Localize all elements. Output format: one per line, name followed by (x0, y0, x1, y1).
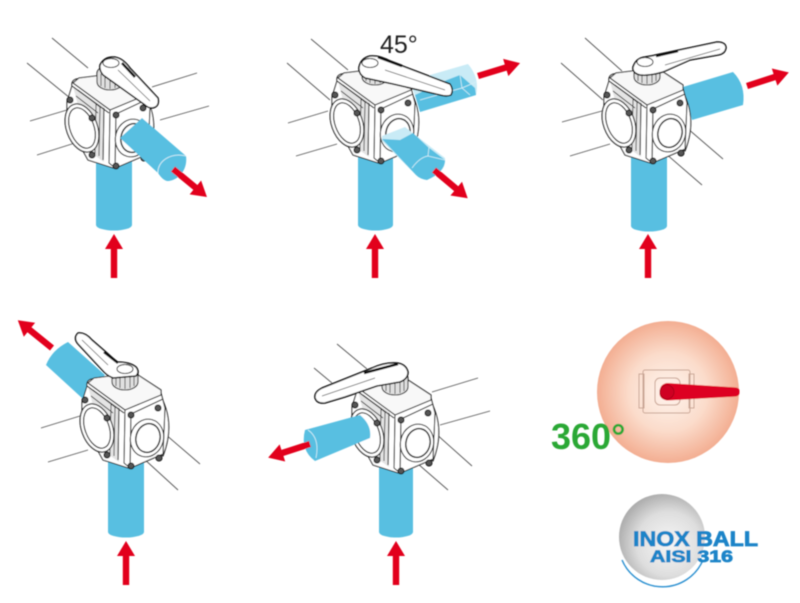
valve top view (639, 370, 694, 413)
arrow: outlet (167, 162, 213, 204)
arrow: outlet (744, 64, 792, 95)
inlet pipe (108, 460, 144, 538)
red handle top view (659, 383, 740, 400)
guide lines (561, 38, 723, 185)
front outlet pipe, partly filled (382, 127, 445, 180)
valve body (324, 61, 419, 164)
outlet pipe (46, 342, 105, 398)
arrow: inlet (366, 234, 384, 278)
label: 360 degrees: 360° (551, 416, 625, 457)
panel: position 2, 45 degree split flow (287, 31, 523, 278)
guide lines (41, 416, 200, 490)
arrow: front outlet (428, 163, 473, 205)
handle (315, 363, 408, 403)
panel: position 3, flow bottom to upper right (561, 38, 792, 278)
arrow: inlet (105, 234, 123, 278)
inlet pipe (631, 150, 667, 232)
inlet pipe (358, 150, 393, 230)
label: 45 degrees: 45° (380, 31, 418, 59)
panel: position 5, flow bottom to left (265, 344, 490, 585)
guide lines (27, 38, 209, 155)
panel: position 1, flow bottom to front right (27, 38, 213, 278)
arrow: outlet (265, 435, 313, 466)
handle (359, 56, 452, 96)
badge: inox ball (619, 494, 758, 587)
arrow: inlet (387, 541, 405, 585)
blue arc (622, 560, 703, 587)
valve body (596, 61, 691, 164)
valve body (59, 66, 154, 169)
valve body (344, 371, 439, 474)
outlet pipe (120, 118, 186, 181)
panel: 360 degree rotation (551, 321, 740, 463)
valve body (74, 366, 169, 469)
panel: position 4, flow bottom to upper left (12, 313, 200, 585)
upper outlet pipe, partly filled (413, 64, 477, 112)
handle (100, 57, 158, 108)
guide lines (287, 39, 348, 156)
arrow: upper outlet (475, 55, 523, 85)
outlet pipe (304, 415, 370, 461)
label: inox ball: INOX BALL (633, 528, 758, 551)
arrow: outlet (12, 313, 58, 355)
label: AISI 316: AISI 316 (650, 547, 733, 566)
inlet pipe (96, 150, 132, 230)
outlet pipe (683, 72, 744, 120)
inlet pipe (379, 465, 413, 538)
guide lines (314, 344, 490, 490)
peach rotation disc (597, 321, 739, 463)
arrow: inlet (639, 234, 657, 278)
handle (76, 333, 138, 378)
steel ball (619, 494, 705, 580)
handle (633, 42, 726, 75)
arrow: inlet (117, 541, 135, 585)
